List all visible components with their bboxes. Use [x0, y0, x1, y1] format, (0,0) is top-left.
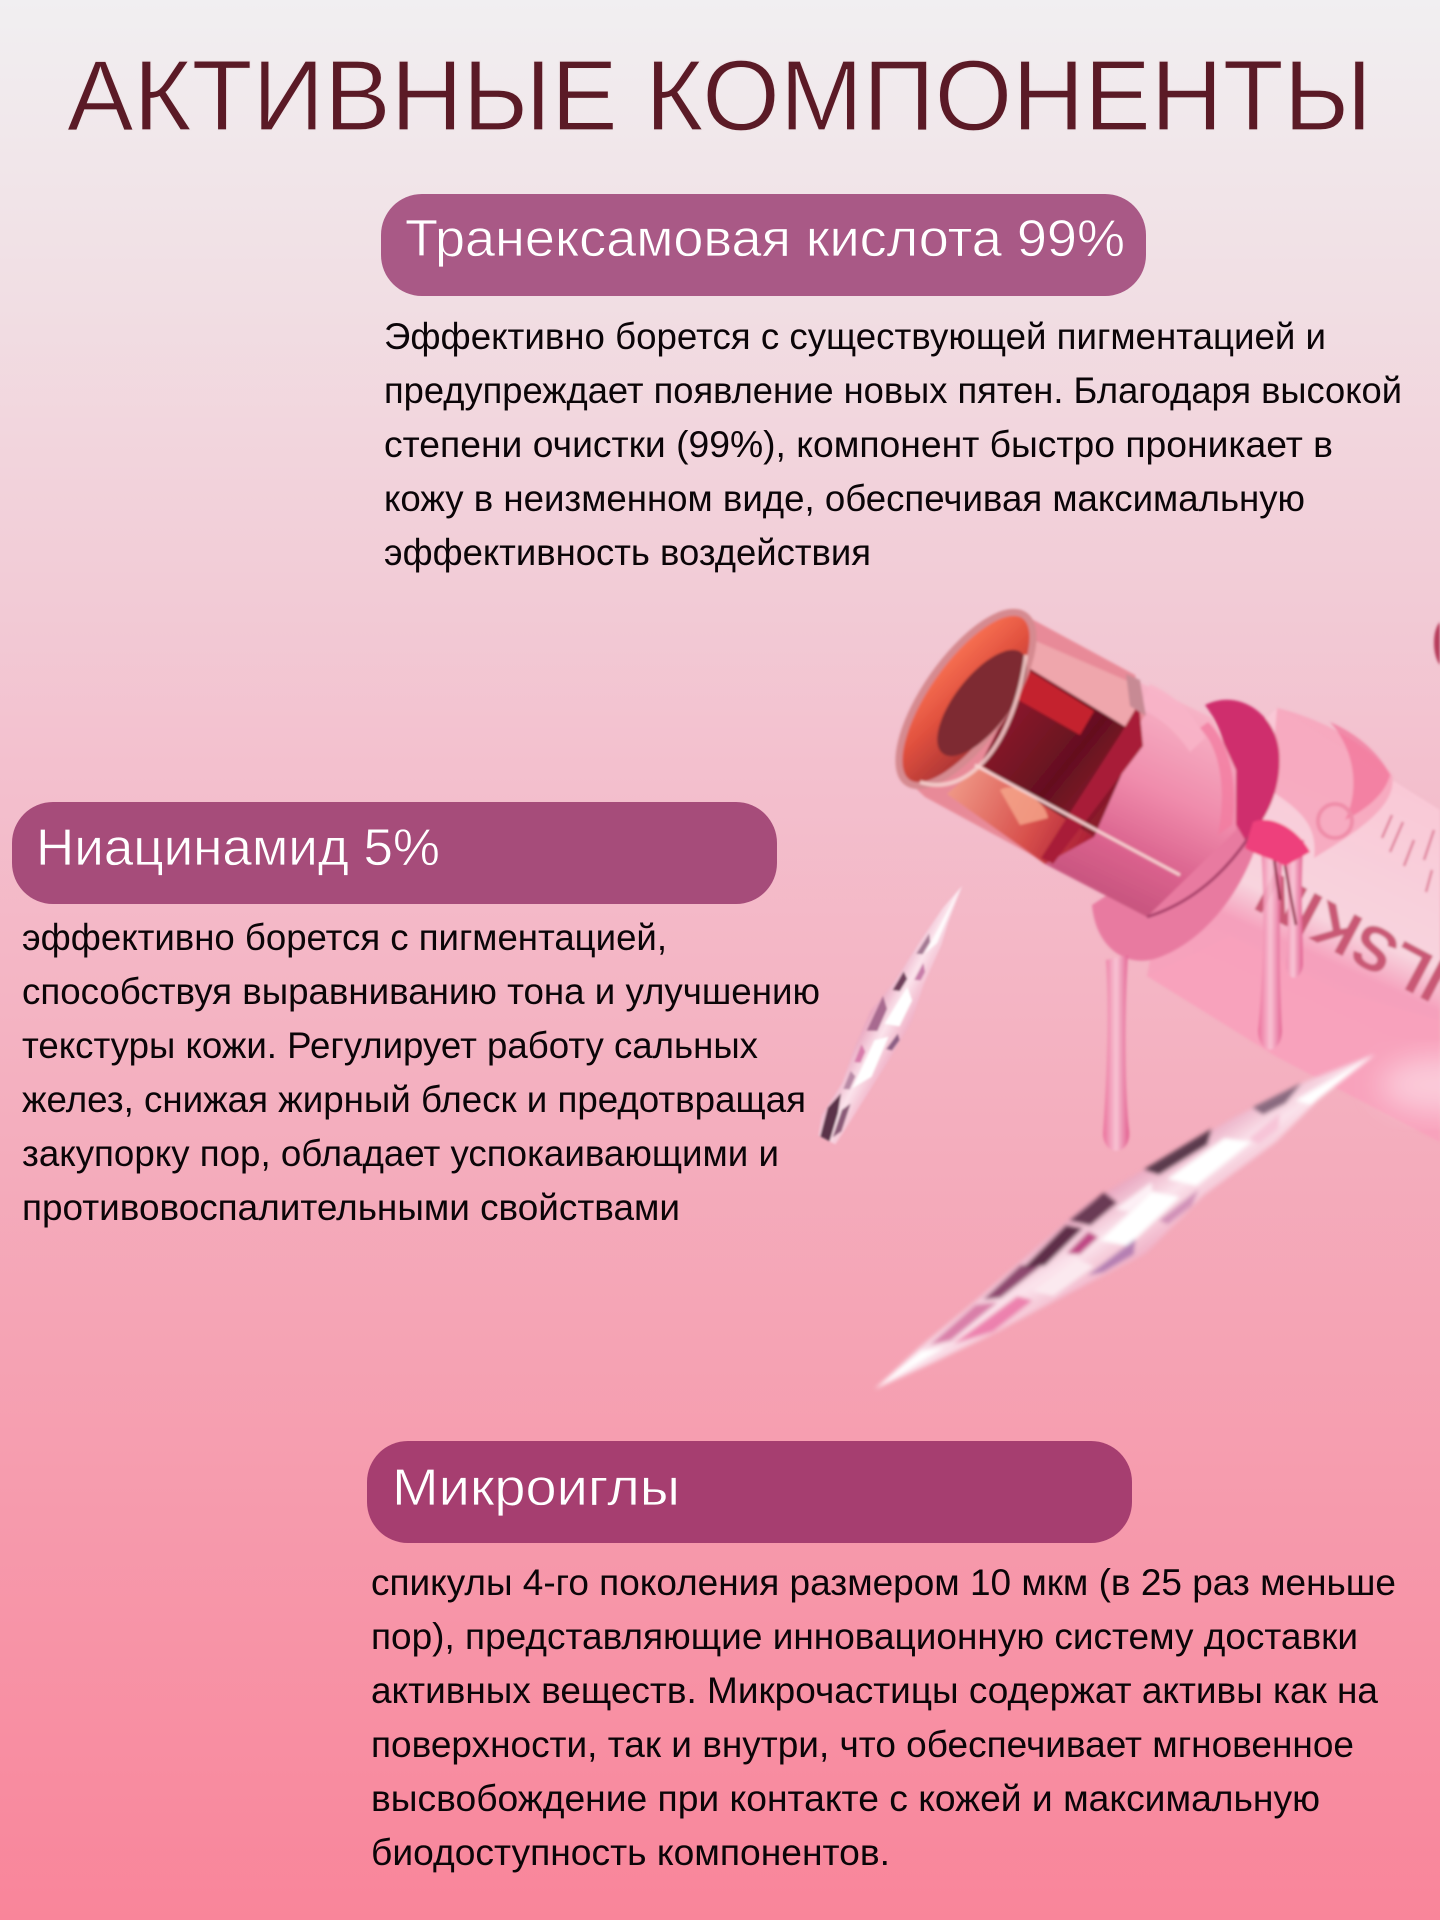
- text block: niacinamide description: текстуры кожи. Регулирует работу сальных: [22, 1025, 758, 1066]
- cut-off element at right edge: [1434, 622, 1440, 665]
- liquid drip right: [1258, 850, 1283, 1050]
- illustration: small crystal shard: [808, 875, 979, 1149]
- illustration: serum bottle with dripping liquid: [875, 593, 1440, 1151]
- text block: niacinamide description: [22, 917, 820, 1228]
- heading pill: niacinamide: [12, 802, 777, 904]
- neck: [1045, 682, 1249, 917]
- heading pill: tranexamic acid: Транексамовая кислота 99%: [405, 210, 1125, 268]
- text block: microneedles description: биодоступность компонентов.: [371, 1832, 890, 1873]
- text block: niacinamide description: эффективно борется с пигментацией,: [22, 917, 667, 958]
- cap opening: [875, 593, 1057, 805]
- panel: niacinamide: [12, 802, 820, 1228]
- text block: tranexamic acid description: степени очистки (99%), компонент быстро проникает в: [384, 424, 1333, 465]
- illustration: large crystal shard: [855, 1024, 1396, 1421]
- text block: tranexamic acid description: Эффективно борется с существующей пигментацией и: [384, 316, 1326, 357]
- text block: microneedles description: спикулы 4-го поколения размером 10 мкм (в 25 раз меньше: [371, 1562, 1396, 1603]
- heading pill: tranexamic acid: [381, 194, 1146, 296]
- small print on tube: [1382, 815, 1434, 892]
- splash blob at collar: [1245, 820, 1310, 866]
- text block: tranexamic acid description: предупреждает появление новых пятен. Благодаря высокой: [384, 370, 1402, 411]
- pink liquid splash: [1270, 708, 1393, 858]
- title: АКТИВНЫЕ КОМПОНЕНТЫ: [67, 40, 1372, 152]
- text block: tranexamic acid description: [384, 316, 1402, 573]
- heading pill: niacinamide: Ниацинамид 5%: [36, 819, 440, 877]
- liquid drip left: [1103, 955, 1129, 1151]
- text block: niacinamide description: способствуя выравниванию тона и улучшению: [22, 971, 820, 1012]
- text block: tranexamic acid description: кожу в неизменном виде, обеспечивая максимальную: [384, 478, 1305, 519]
- text block: microneedles description: высвобождение при контакте с кожей и максимальную: [371, 1778, 1320, 1819]
- tube body: [1147, 708, 1440, 1142]
- label circle on tube: [1318, 804, 1352, 838]
- panel: tranexamic acid: [381, 194, 1402, 573]
- text block: microneedles description: активных веществ. Микрочастицы содержат активы как на: [371, 1670, 1378, 1711]
- collar ring: [1205, 700, 1280, 840]
- liquid drip short: [1282, 840, 1304, 978]
- text block: niacinamide description: противовоспалительными свойствами: [22, 1187, 680, 1228]
- heading pill: microneedles: [367, 1441, 1132, 1543]
- flat pink disc: [1092, 800, 1262, 961]
- text block: niacinamide description: закупорку пор, обладает успокаивающими и: [22, 1133, 779, 1174]
- text block: niacinamide description: желез, снижая жирный блеск и предотвращая: [22, 1079, 806, 1120]
- panel: microneedles: [367, 1441, 1396, 1873]
- text block: microneedles description: пор), представляющие инновационную систему доставки: [371, 1616, 1358, 1657]
- text block: microneedles description: поверхности, так и внутри, что обеспечивает мгновенное: [371, 1724, 1354, 1765]
- text block: tranexamic acid description: эффективность воздействия: [384, 532, 871, 573]
- text block: microneedles description: [371, 1562, 1396, 1873]
- glass cap with red serum: [875, 593, 1180, 875]
- heading pill: microneedles: Микроиглы: [392, 1459, 680, 1517]
